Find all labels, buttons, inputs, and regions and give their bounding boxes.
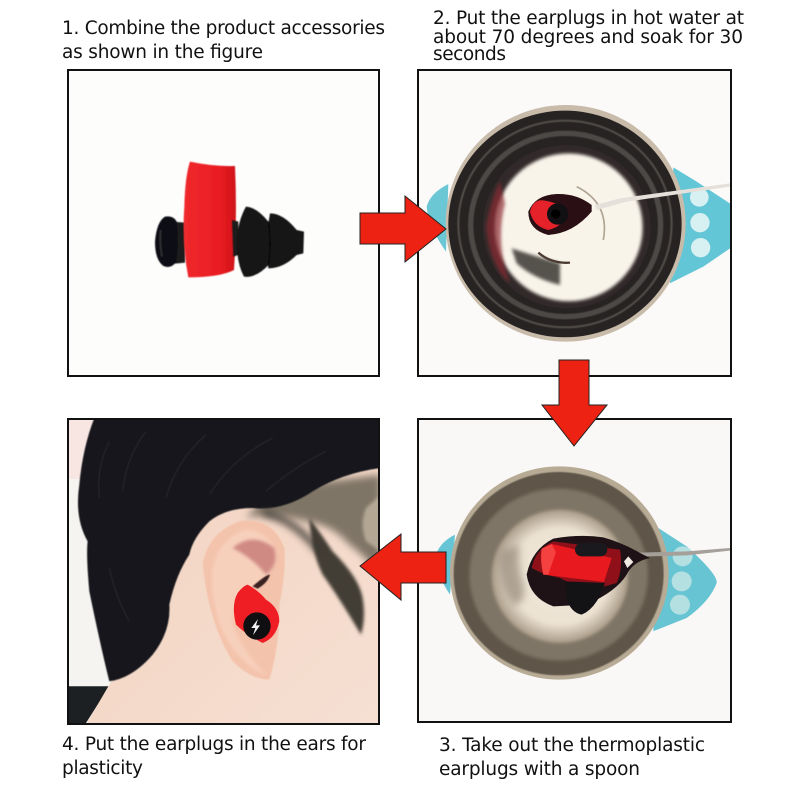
icon: blue bowl base bbox=[427, 167, 735, 283]
icon: red earplug in ear bbox=[234, 585, 279, 643]
heading: step 2 bbox=[433, 8, 744, 65]
icon: sideburn hair bbox=[263, 513, 364, 635]
icon: spoon handle bbox=[640, 548, 730, 557]
arrow: step 3 to step 4 bbox=[360, 534, 446, 600]
icon: hair strands bbox=[99, 431, 326, 621]
heading: step 3 bbox=[439, 735, 705, 780]
heading: step 4: plasticity bbox=[62, 758, 143, 779]
heading: step 2: 2. Put the earplugs in hot water at bbox=[433, 8, 744, 29]
heading: step 2: about 70 degrees and soak for 30 bbox=[433, 27, 743, 48]
icon: black flanged tip bbox=[232, 207, 304, 277]
icon: black tip bbox=[565, 581, 605, 615]
icon: ear bbox=[203, 521, 285, 680]
heading: step 3: 3. Take out the thermoplastic bbox=[439, 735, 705, 756]
panel: step 4 ear photo bbox=[66, 418, 381, 725]
icon: red earplug body bbox=[184, 162, 236, 277]
panel: step 3 bowl and spoon photo bbox=[418, 419, 731, 722]
icon: grey hair fade bbox=[246, 475, 381, 575]
arrow: step 2 to step 3 bbox=[542, 360, 607, 446]
icon: red earplug piece bbox=[541, 544, 612, 582]
heading: step 4: 4. Put the earplugs in the ears for bbox=[62, 734, 366, 755]
icon: spoon with earplug bbox=[528, 183, 730, 235]
icon: dark strip bottom left bbox=[66, 686, 109, 723]
heading: step 2: seconds bbox=[433, 44, 506, 65]
icon: spoon bowl bbox=[527, 536, 650, 606]
icon: steel bowl bbox=[450, 466, 669, 680]
panel: step 1 product photo bbox=[68, 70, 379, 376]
heading: step 4 bbox=[62, 734, 366, 779]
icon: blue bowl base bbox=[435, 528, 717, 631]
icon: black stem of earplug bbox=[155, 216, 185, 267]
icon: steel bowl bbox=[446, 105, 686, 342]
panel: step 2 bowl photo bbox=[418, 70, 735, 376]
heading: step 1: 1. Combine the product accessories bbox=[62, 18, 385, 39]
arrow: step 1 to step 2 bbox=[360, 196, 446, 262]
heading: step 3: earplugs with a spoon bbox=[439, 759, 640, 780]
heading: step 1: as shown in the figure bbox=[62, 42, 263, 63]
icon: spoon with red earplug bbox=[527, 536, 730, 615]
icon: neck skin bbox=[86, 451, 381, 725]
icon: black hair bbox=[78, 418, 381, 681]
heading: step 1 bbox=[62, 18, 385, 63]
